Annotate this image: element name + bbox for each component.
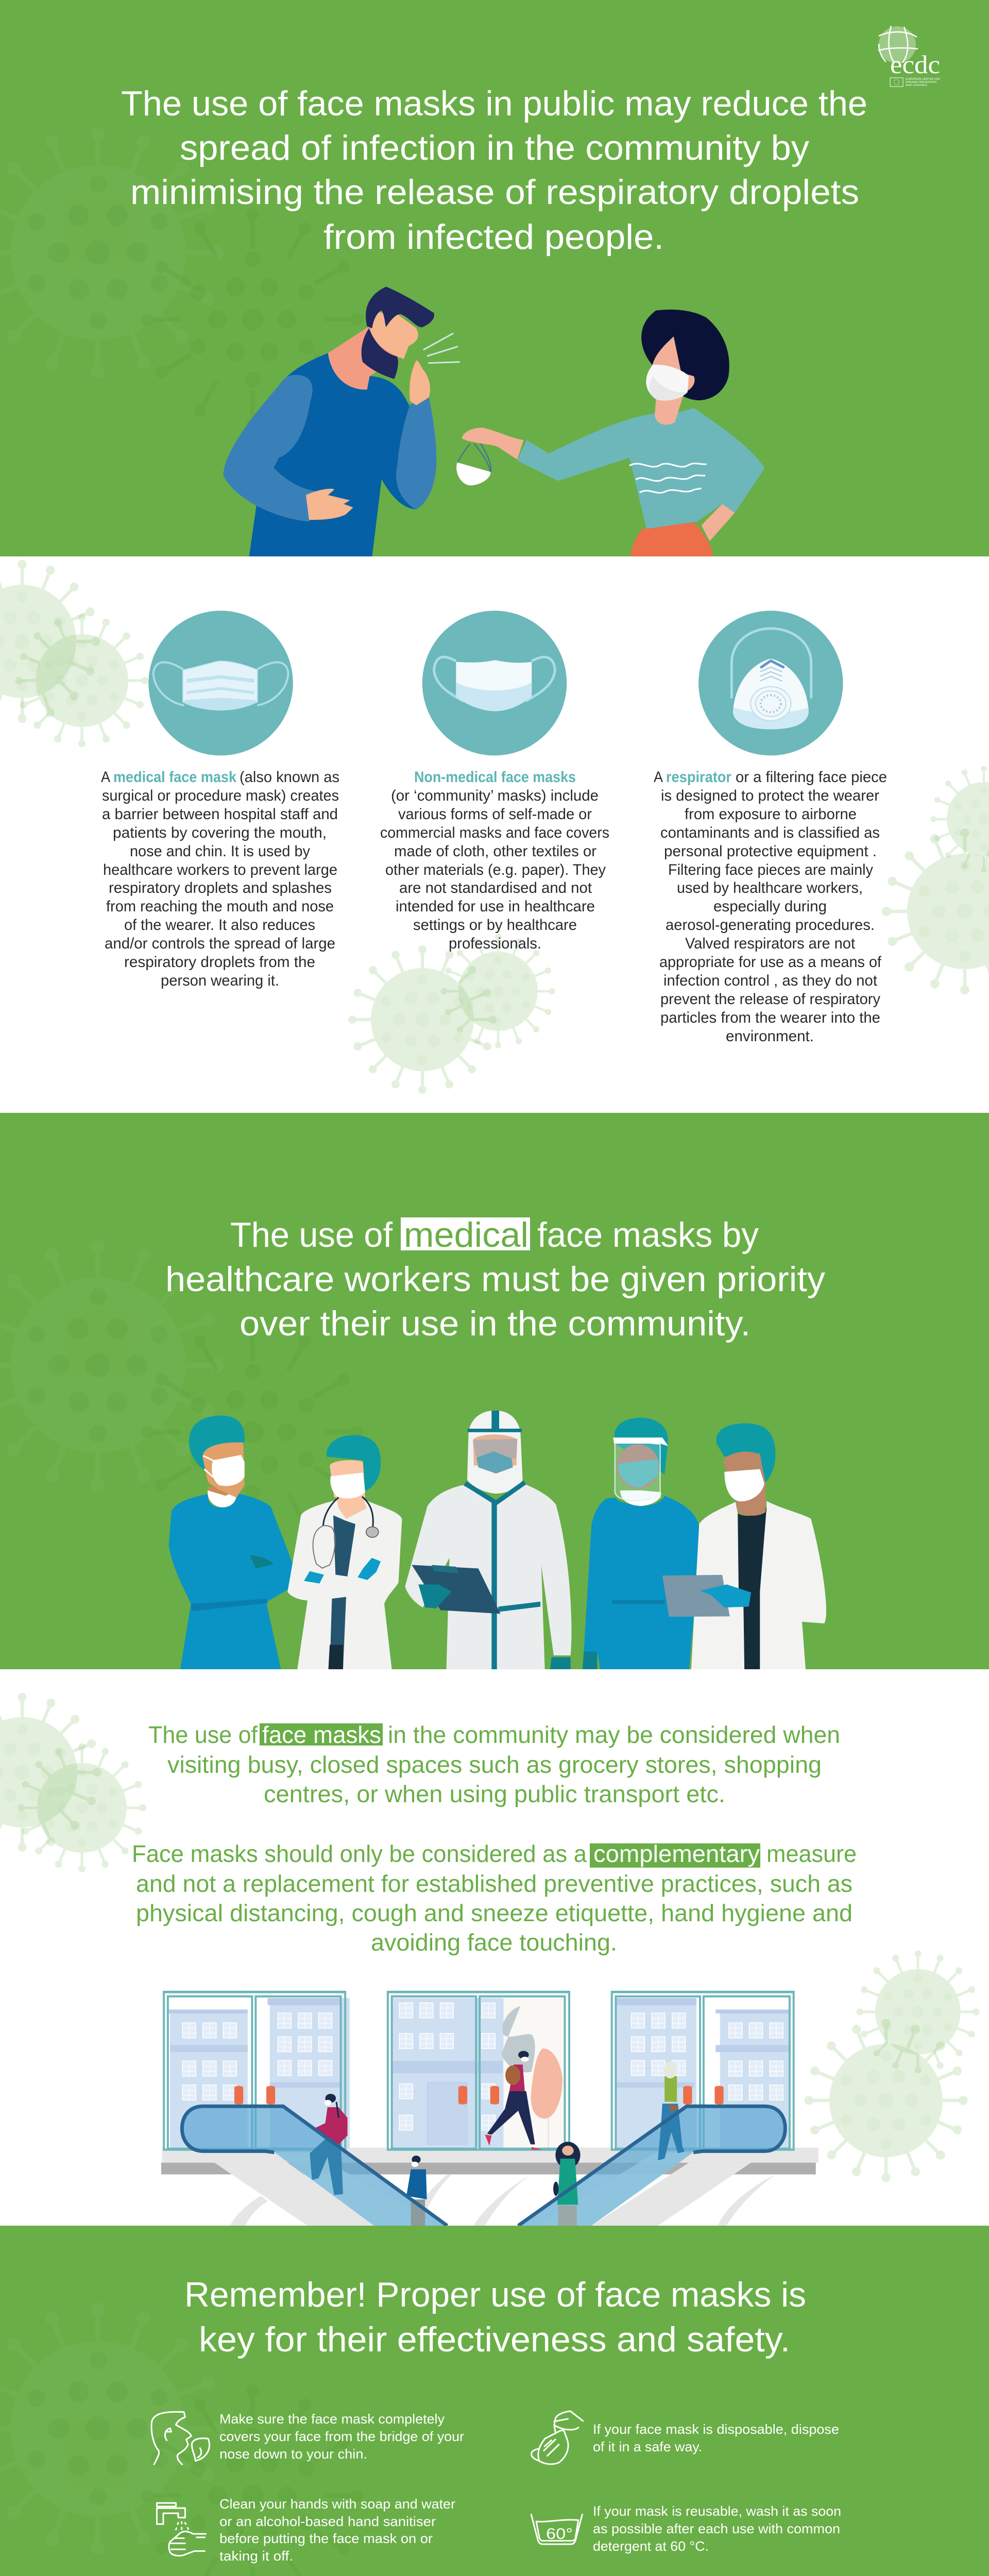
text: non-medical face masks: Non-medical face masks	[414, 769, 576, 786]
ecdc logo	[878, 26, 940, 87]
tip: clean hands: or an alcohol-based hand sanitiser	[219, 2514, 436, 2529]
highlight: complementary: complementary	[593, 1840, 760, 1867]
text: medical face mask: (also known as	[240, 769, 339, 786]
tip: clean hands	[157, 2496, 455, 2564]
text: respirator: infection control , as they do not	[663, 972, 878, 989]
text: non-medical face masks: professionals.	[449, 935, 541, 952]
panel: public use of masks	[0, 0, 989, 556]
text: medical face mask: medical face mask	[113, 769, 236, 786]
title: minimising the release of respiratory droplets	[130, 173, 859, 212]
ecdc logo: AND CONTROL	[906, 84, 928, 87]
handrail left	[182, 2106, 447, 2226]
shopper in teal dress	[553, 2142, 581, 2226]
door handles	[234, 2086, 724, 2105]
background virus watermark	[0, 126, 364, 431]
text: medical face mask: surgical or procedure mask) creates	[102, 787, 339, 804]
text: respirator: from exposure to airborne	[685, 806, 857, 823]
panel: mask types	[0, 556, 989, 1113]
person: worker in protective suit	[405, 1411, 571, 1669]
heading	[184, 2275, 806, 2359]
text: medical face mask: of the wearer. It also reduces	[124, 917, 315, 934]
shopper man	[406, 2156, 427, 2226]
tip: reusable masks: detergent at 60 °C.	[593, 2538, 709, 2554]
shop window right	[611, 1991, 794, 2150]
heading: Remember! Proper use of face masks is	[184, 2275, 806, 2314]
shopper on left escalator	[310, 2094, 348, 2195]
text: non-medical face masks: intended for use in healthcare	[396, 898, 595, 915]
heading: key for their effectiveness and safety.	[199, 2320, 790, 2359]
text: complementary measure: avoiding face touching.	[371, 1929, 617, 1956]
text: respirator: aerosol-generating procedures.	[666, 917, 875, 934]
text: respirator	[654, 769, 887, 1045]
text: complementary measure: Face masks should only be considered as a	[132, 1840, 587, 1867]
title	[121, 84, 867, 257]
highlight: medical: medical	[404, 1215, 528, 1255]
text: respirator: appropriate for use as a means of	[659, 954, 882, 971]
shop window centre	[387, 1991, 569, 2150]
text: medical face mask: patients by covering the mouth,	[113, 824, 327, 841]
illustration: shopping centre escalators	[161, 1991, 819, 2226]
handrail right	[518, 2106, 785, 2226]
shopper blonde	[658, 2061, 685, 2160]
person: doctor with stethoscope	[287, 1435, 402, 1669]
person: worker with face shield	[583, 1418, 699, 1669]
background virus watermark	[0, 2302, 364, 2576]
text: respirator: contaminants and is classified as	[660, 824, 880, 841]
text: where masks may be considered: centres, or when using public transport etc.	[264, 1781, 725, 1807]
text: non-medical face masks: settings or by healthcare	[413, 917, 577, 934]
heading: over their use in the community.	[240, 1304, 751, 1343]
text: non-medical face masks: are not standardised and not	[399, 879, 592, 896]
text: medical face mask: from reaching the mouth and nose	[106, 898, 334, 915]
background viruses	[0, 560, 989, 1094]
tip: reusable masks: as possible after each use with common	[593, 2521, 840, 2536]
text: non-medical face masks: commercial masks and face covers	[380, 824, 609, 841]
ecdc logo: EUROPEAN CENTRE FOR	[906, 78, 940, 81]
shopper with backpack	[485, 2051, 542, 2150]
tip: clean hands: taking it off.	[219, 2548, 293, 2564]
text: where masks may be considered: The use of	[148, 1721, 258, 1748]
illustration: healthcare team	[169, 1411, 826, 1669]
tip: disposable masks	[532, 2411, 839, 2464]
tip: reusable masks: If your mask is reusable, wash it as soon	[593, 2503, 841, 2519]
person: surgeon in blue scrubs	[169, 1416, 297, 1669]
tip: covering face: nose down to your chin.	[219, 2446, 367, 2462]
escalator left glass and steps	[182, 2106, 447, 2226]
tip: covering face: covers your face from the bridge of your	[219, 2429, 464, 2444]
heading: The use of	[230, 1215, 393, 1255]
text: complementary measure: and not a replacement for established preventive practices, such as	[136, 1870, 852, 1897]
tip: clean hands: Clean your hands with soap and water	[219, 2496, 455, 2512]
text: medical face mask	[101, 769, 339, 989]
title: spread of infection in the community by	[180, 128, 809, 167]
text: respirator: particles from the wearer into the	[660, 1009, 880, 1026]
text: non-medical face masks	[380, 769, 609, 952]
text: where masks may be considered	[148, 1721, 840, 1807]
illustration: coughing man	[223, 287, 459, 556]
text: medical face mask: nose and chin. It is used by	[130, 843, 310, 860]
text: complementary measure: measure	[766, 1840, 857, 1867]
text: complementary measure: physical distancing, cough and sneeze etiquette, hand hygiene and	[136, 1900, 852, 1926]
tip: covering face	[151, 2411, 464, 2464]
escalator right glass and steps	[518, 2106, 785, 2226]
text: where masks may be considered: visiting busy, closed spaces such as grocery stores, shopping	[167, 1751, 822, 1778]
text: complementary measure	[132, 1840, 857, 1956]
panel: proper use of masks	[0, 2226, 989, 2576]
text: respirator: or a filtering face piece	[736, 769, 887, 786]
text: non-medical face masks: (or ‘community’ masks) include	[391, 787, 599, 804]
panel: community use	[0, 1669, 989, 2226]
text: respirator: A	[654, 769, 663, 786]
floor and supports	[161, 2147, 819, 2226]
icon: non-medical face mask	[422, 611, 567, 755]
text: respirator: prevent the release of respiratory	[660, 991, 880, 1008]
title: The use of face masks in public may reduce the	[121, 84, 867, 123]
text: medical face mask: a barrier between hospital staff and	[102, 806, 338, 823]
tip: disposable masks: of it in a safe way.	[593, 2439, 702, 2454]
text: where masks may be considered: in the community may be considered when	[388, 1721, 840, 1748]
title: from infected people.	[323, 217, 664, 257]
icon: medical face mask	[148, 611, 293, 755]
icon: tap and hands	[157, 2503, 206, 2556]
text: non-medical face masks: various forms of self-made or	[398, 806, 592, 823]
tip: reusable masks	[531, 2503, 841, 2554]
text: respirator: especially during	[713, 898, 827, 915]
shop window left	[163, 1991, 350, 2150]
text: respirator: used by healthcare workers,	[677, 879, 863, 896]
icon: wash at 60 degrees	[531, 2515, 582, 2544]
text: respirator: personal protective equipment .	[664, 843, 877, 860]
text: medical face mask: healthcare workers to prevent large	[103, 861, 337, 878]
icon: respirator	[698, 611, 843, 755]
tip: disposable masks: If your face mask is disposable, dispose	[593, 2421, 839, 2437]
heading: healthcare workers must be given priority	[165, 1260, 825, 1299]
background virus watermark	[0, 1239, 364, 1544]
person: doctor with tablet	[662, 1423, 826, 1669]
tip: clean hands: before putting the face mask on or	[219, 2531, 433, 2546]
text: non-medical face masks: other materials (e.g. paper). They	[385, 861, 606, 878]
heading	[165, 1215, 825, 1343]
text: respirator: respirator	[666, 769, 731, 786]
text: medical face mask: respiratory droplets from the	[124, 954, 315, 971]
text: non-medical face masks: made of cloth, other textiles or	[394, 843, 596, 860]
illustration: woman with mask	[456, 310, 764, 556]
icon: hand holding mask	[532, 2411, 583, 2464]
tip: covering face: Make sure the face mask completely	[219, 2411, 445, 2427]
text: respirator: Valved respirators are not	[685, 935, 856, 952]
ecdc logo: DISEASE PREVENTION	[906, 81, 936, 84]
text: respirator: Filtering face pieces are mainly	[668, 861, 873, 878]
text: medical face mask: A	[101, 769, 110, 786]
icon: wash at 60 degrees: 60°	[546, 2526, 573, 2543]
ecdc logo: ecdc	[890, 50, 940, 79]
icon: head with mask	[151, 2412, 209, 2464]
heading: face masks by	[537, 1215, 759, 1255]
text: medical face mask: and/or controls the spread of large	[105, 935, 335, 952]
highlight: face masks: face masks	[262, 1721, 381, 1748]
text: respirator: environment.	[726, 1028, 814, 1045]
text: medical face mask: person wearing it.	[161, 972, 279, 989]
panel: healthcare workers	[0, 1113, 989, 1669]
background viruses	[0, 1693, 980, 2182]
text: respirator: is designed to protect the wearer	[661, 787, 879, 804]
text: medical face mask: respiratory droplets and splashes	[109, 879, 332, 896]
